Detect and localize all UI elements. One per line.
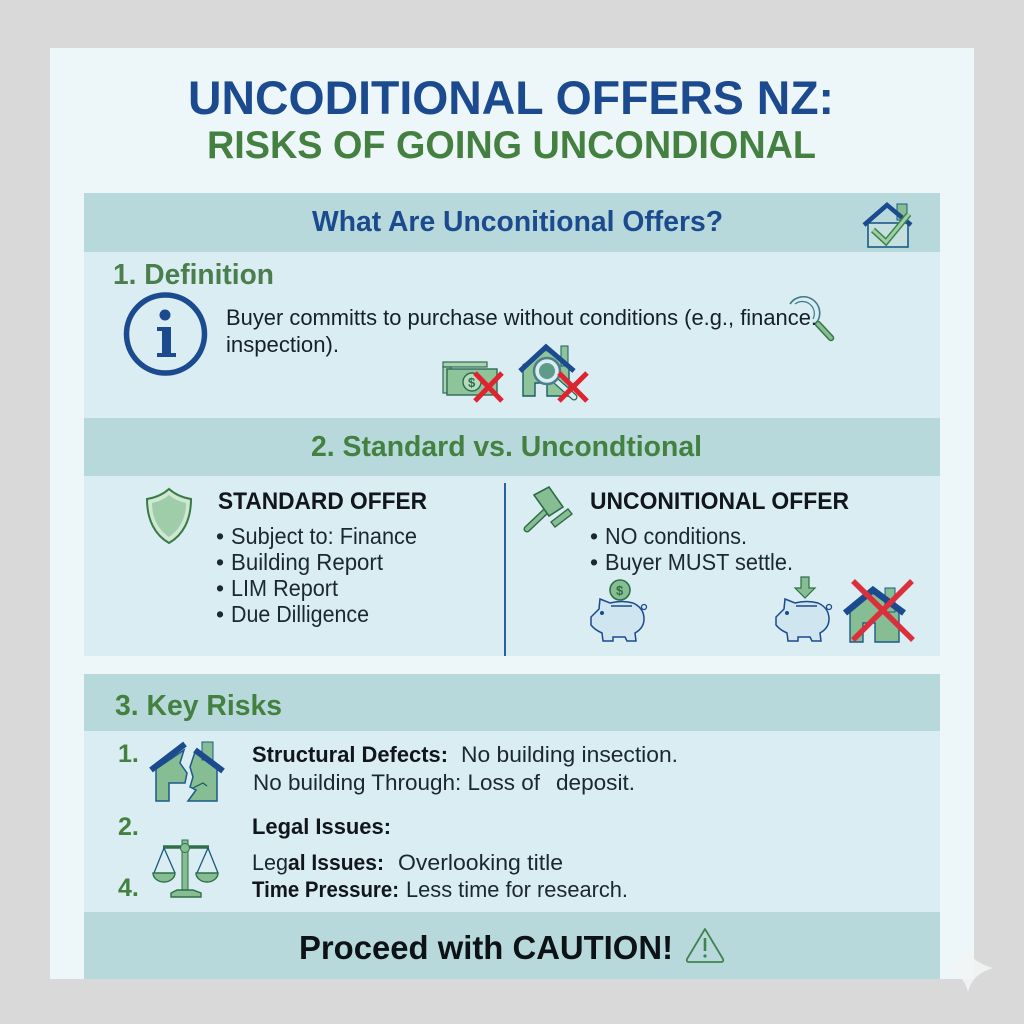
icon: cash crossed out: [443, 362, 502, 401]
standard offer column: STANDARD OFFER: [218, 488, 427, 515]
icon: house inspection crossed out: [520, 346, 587, 401]
risk text: No building Through: Loss of: [253, 770, 541, 795]
standard offer column: •: [216, 549, 224, 575]
icon: shield: [147, 489, 191, 543]
caution banner: [84, 912, 940, 979]
section header band: [84, 193, 940, 252]
unconditional offer column: •: [590, 549, 598, 575]
risk text: No building insection.: [461, 742, 678, 767]
risk text: al Issues:: [288, 850, 384, 875]
icon: piggy bank with coin: $: [616, 583, 624, 598]
risk text: [252, 742, 678, 902]
risk text: Legal Issues:: [252, 814, 391, 839]
risk text: deposit.: [556, 770, 635, 795]
standard offer column: Due Dilligence: [231, 601, 369, 627]
risk numbers: 4.: [118, 874, 139, 902]
standard offer column: LIM Report: [231, 575, 339, 601]
definition text: inspection).: [226, 332, 339, 357]
icon: magnifier: [790, 297, 831, 338]
section header band: [84, 674, 940, 731]
risk numbers: 2.: [118, 813, 139, 841]
title: RISKS OF GOING UNCONDIONAL: [207, 124, 816, 167]
risk text: Time Pressure:: [252, 877, 399, 902]
standard offer column: Subject to: Finance: [231, 523, 417, 549]
icon: cash crossed out: $: [468, 375, 476, 390]
unconditional offer column: •: [590, 523, 598, 549]
unconditional offer column: NO conditions.: [605, 523, 747, 549]
standard offer column: •: [216, 601, 224, 627]
icon: piggy bank with down arrow: [776, 577, 832, 641]
standard offer column: Building Report: [231, 549, 384, 575]
icon: house with check: [864, 204, 911, 247]
definition text: Buyer committs to purchase without conditions (e.g., finance.: [226, 305, 817, 330]
risk text: Less time for research.: [406, 877, 628, 902]
panel: key risks: [84, 674, 940, 912]
divider: [504, 483, 506, 656]
standard offer column: [216, 488, 427, 627]
icon: gavel: [527, 487, 572, 529]
risk text: Structural Defects:: [252, 742, 448, 767]
unconditional offer column: UNCONITIONAL OFFER: [590, 488, 849, 515]
definition heading: 1. Definition: [113, 259, 274, 291]
unconditional offer column: Buyer MUST settle.: [605, 549, 793, 575]
risk text: Leg: [252, 850, 288, 875]
risk numbers: 1.: [118, 740, 139, 768]
caution banner: Proceed with CAUTION!: [299, 929, 673, 966]
icon: info: [126, 295, 204, 373]
icon: scales: [153, 840, 218, 897]
title: UNCODITIONAL OFFERS NZ:: [188, 72, 834, 125]
icon: piggy bank with coin: [591, 580, 646, 641]
standard offer column: •: [216, 523, 224, 549]
sparkle watermark: [944, 950, 993, 992]
icon: warning triangle: [687, 929, 723, 962]
unconditional offer column: [590, 488, 849, 575]
risk text: Overlooking title: [398, 850, 563, 875]
section header band: [84, 418, 940, 476]
panel: what are unconditional offers: [84, 193, 940, 418]
standard offer column: •: [216, 575, 224, 601]
section heading: What Are Unconitional Offers?: [312, 206, 723, 238]
section heading: 3. Key Risks: [115, 690, 282, 722]
icon: house crossed out: [845, 581, 913, 642]
icon: cracked house: [151, 742, 223, 801]
definition text: [226, 305, 817, 357]
section heading: 2. Standard vs. Uncondtional: [311, 431, 702, 463]
panel: standard vs unconditional: [84, 418, 940, 656]
risk numbers: [118, 740, 139, 902]
title: [188, 72, 834, 167]
